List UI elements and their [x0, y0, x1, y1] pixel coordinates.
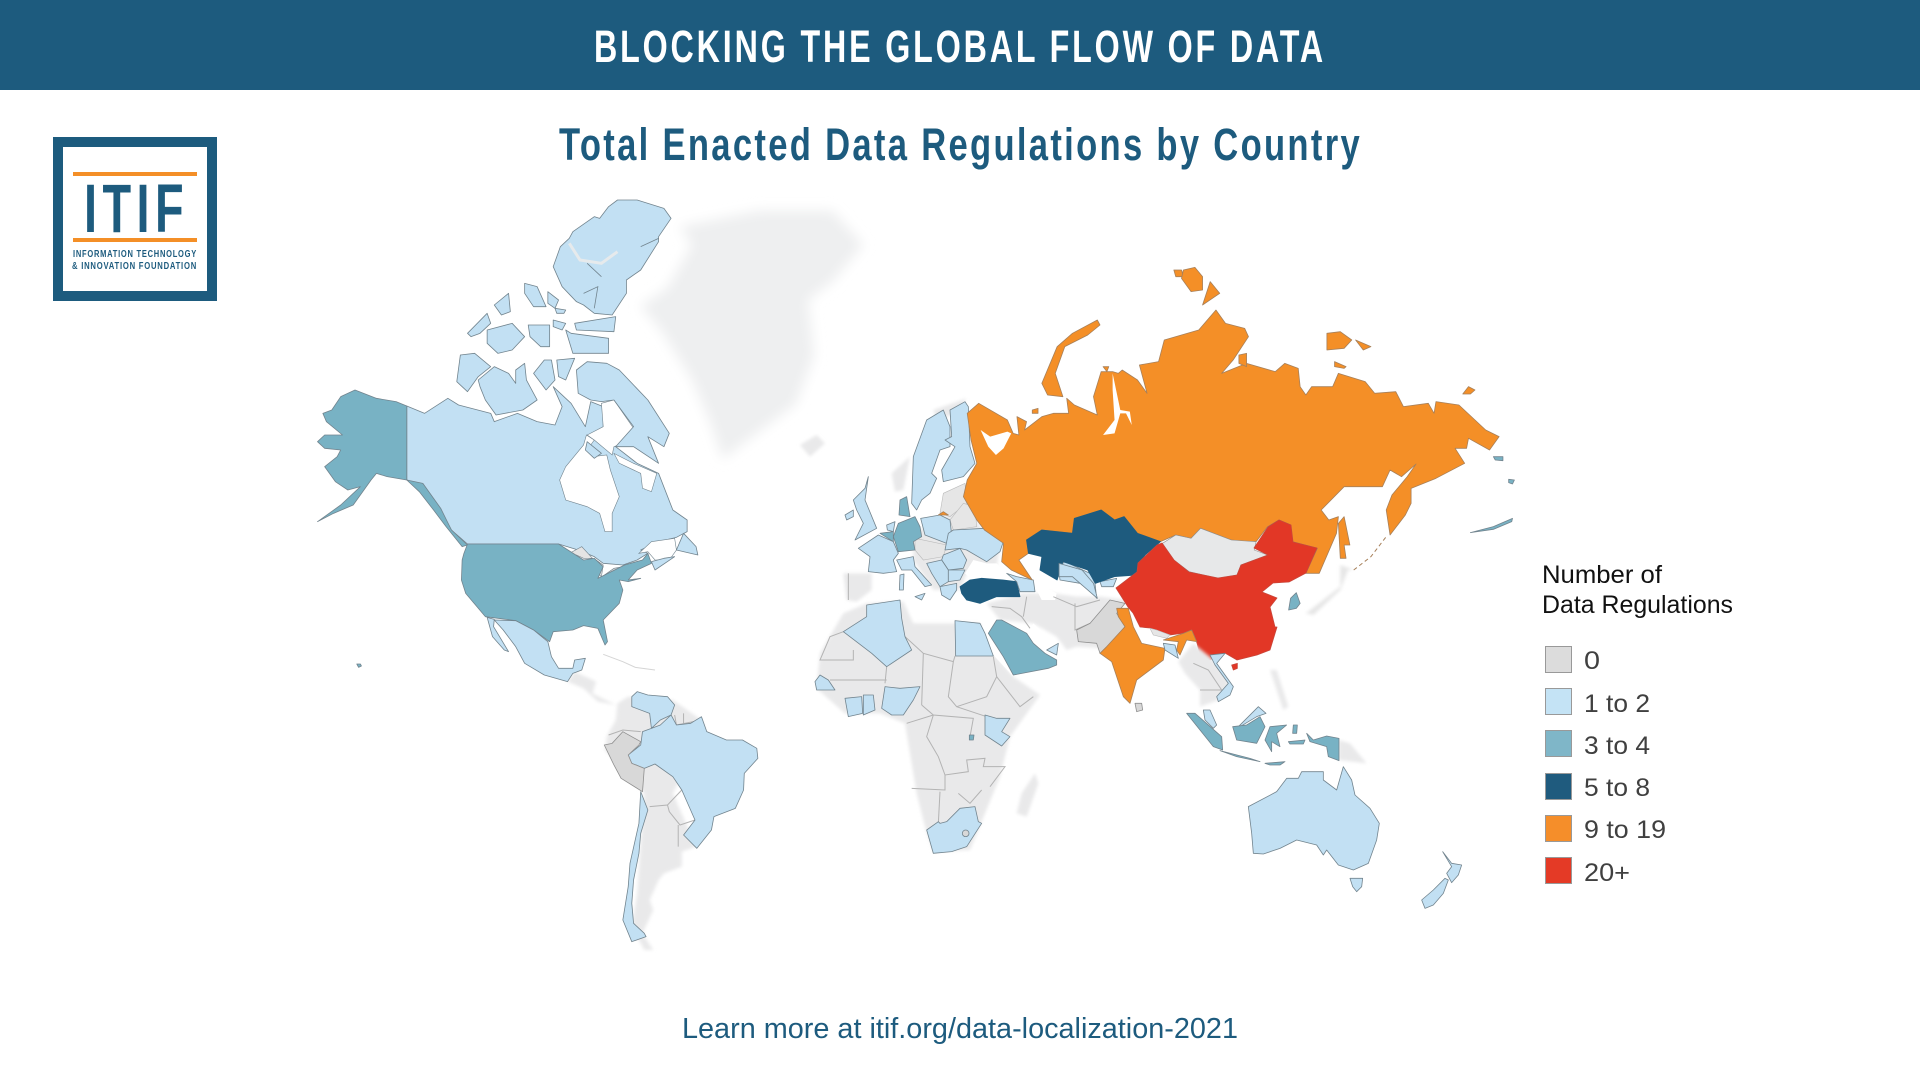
India: [1100, 608, 1165, 703]
Ukraine: [945, 528, 1003, 562]
legend item: 1 to 2: 1 to 2: [1584, 690, 1650, 718]
map: Russia and neighbours: [963, 267, 1514, 615]
legend item: 9 to 19: [1546, 816, 1666, 844]
Nigeria: [882, 687, 920, 715]
Ghana: [863, 695, 875, 715]
logo: ITIF: INFORMATION TECHNOLOGY: [73, 249, 197, 260]
Black Sea: [965, 560, 1013, 580]
Baffin Island: [576, 362, 669, 463]
Arctic islands: [457, 283, 616, 415]
Ireland: [845, 510, 853, 520]
Sri Lanka: [1135, 703, 1143, 712]
logo: ITIF: & INNOVATION FOUNDATION: [72, 261, 197, 272]
header banner: [0, 0, 1920, 90]
Baltic states: [940, 483, 967, 517]
Severnaya Zemlya: [1174, 267, 1220, 305]
map: Greenland and faint islands: [640, 211, 863, 459]
map: North America: [317, 200, 698, 578]
Sakhalin: [1338, 517, 1350, 558]
France: [858, 535, 898, 573]
Kazakhstan: [1027, 510, 1160, 583]
Italy: [897, 557, 932, 587]
map: Europe, Africa, Middle East: [800, 398, 1165, 853]
Gulf of Ob: [1103, 373, 1132, 435]
South Africa: [927, 807, 982, 853]
Hainan: [1232, 663, 1237, 670]
Kolguev and small islands: [1032, 353, 1247, 413]
Turkey: [960, 578, 1020, 603]
faint Central and South America land: [567, 672, 705, 950]
Lesotho: [962, 830, 969, 837]
Foxe Basin: [587, 400, 634, 455]
Chile: [623, 792, 648, 942]
Sweden and Norway: [912, 410, 950, 510]
Newfoundland: [676, 533, 698, 555]
world map: [317, 200, 1514, 950]
Sulawesi: [1265, 725, 1287, 752]
USA: [461, 544, 651, 645]
Venezuela: [632, 692, 675, 728]
Persian Gulf: [1027, 623, 1055, 650]
legend item: 20+: 20+: [1584, 859, 1630, 887]
Hawaii: [357, 664, 361, 667]
Rwanda: [969, 735, 974, 740]
New Zealand South Island: [1422, 878, 1448, 908]
Alaska panhandle: [407, 480, 467, 547]
South America borders: [609, 713, 701, 847]
faint Southeast Asia land: [1178, 643, 1367, 763]
Algeria: [843, 600, 912, 667]
Wrangel Island: [1463, 387, 1475, 394]
Greece: [940, 583, 957, 600]
Sardinia: [899, 574, 904, 590]
legend item: 0: [1546, 646, 1600, 675]
Senegal: [815, 675, 835, 690]
legend item: 1 to 2: [1546, 688, 1650, 718]
Attu: [1509, 479, 1514, 484]
Maluku: [1293, 725, 1297, 733]
Egypt: [955, 621, 993, 656]
legend: [1542, 561, 1733, 887]
Sicily: [915, 593, 925, 600]
legend title: [1542, 561, 1733, 619]
logo: ITIF: ITIF: [84, 170, 189, 247]
Kyrgyzstan: [1100, 578, 1117, 587]
Great Lakes: [569, 547, 623, 578]
Romania: [942, 548, 967, 570]
subtitle: Total Enacted Data Regulations by Country: [559, 119, 1362, 170]
Papua: [1307, 733, 1339, 761]
legend item: 3 to 4: 3 to 4: [1584, 732, 1650, 760]
Commander islands: [1493, 457, 1503, 461]
Nova Scotia: [651, 557, 675, 570]
Alaska: [317, 390, 407, 522]
Himalayan India: [1163, 630, 1197, 655]
Malaysia peninsula: [1203, 710, 1217, 728]
Sumatra: [1187, 713, 1223, 750]
Baja California: [487, 617, 509, 652]
legend title: Number of: [1542, 561, 1662, 589]
Cuba and Hispaniola: [603, 654, 655, 670]
Turkmenistan and Uzbekistan inset: [1059, 563, 1097, 598]
Kaliningrad: [938, 512, 948, 515]
Belarus: [950, 503, 977, 530]
Bulgaria: [948, 570, 965, 582]
Brazil: [628, 715, 758, 848]
logo: ITIF: [58, 142, 212, 296]
legend item: 3 to 4: [1546, 730, 1650, 760]
Finland: [942, 402, 975, 482]
Gulf of St Lawrence: [639, 538, 676, 560]
Kenya: [985, 715, 1010, 746]
Ivory Coast: [845, 697, 863, 717]
Lesser Sunda: [1265, 762, 1285, 765]
Central Europe: [915, 538, 947, 560]
New Siberian Islands: [1327, 332, 1371, 368]
Red Sea: [980, 625, 1013, 677]
Bangladesh: [1163, 643, 1178, 658]
Denmark: [899, 497, 910, 517]
Hudson Bay: [560, 435, 619, 532]
South Korea: [1289, 593, 1300, 610]
New Zealand North Island: [1443, 852, 1462, 883]
Uzbekistan: [1058, 562, 1097, 598]
Mongolia: [1162, 528, 1268, 578]
Malaysia Borneo: [1238, 707, 1266, 727]
Borneo: [1233, 717, 1265, 743]
UAE: [1047, 643, 1058, 655]
header banner: BLOCKING THE GLOBAL FLOW OF DATA: [594, 21, 1326, 72]
Novaya Zemlya: [1042, 320, 1100, 397]
Nepal: [1150, 628, 1170, 638]
Japan: [1306, 565, 1354, 615]
China: [1116, 520, 1317, 660]
Pakistan: [1077, 600, 1125, 653]
Netherlands: [887, 522, 895, 532]
footer link text: Learn more at itif.org/data-localization-2021: [682, 1013, 1238, 1045]
Southeast Asia borders: [1193, 663, 1222, 690]
Belgium: [880, 532, 893, 542]
legend item: 9 to 19: 9 to 19: [1584, 816, 1666, 844]
Kuril islands: [1354, 537, 1386, 570]
Southampton Island: [585, 442, 601, 458]
Vietnam: [1210, 653, 1233, 702]
Ellesmere Island: [553, 200, 671, 315]
Balkans: [927, 560, 948, 587]
legend title: Data Regulations: [1542, 591, 1733, 619]
Mexico: [494, 620, 585, 682]
Africa borders: [820, 573, 1100, 823]
Java: [1220, 751, 1260, 762]
White Sea: [981, 430, 1011, 455]
Australia: [1248, 767, 1379, 870]
Peru: [604, 732, 644, 792]
Aleutians east: [1470, 518, 1512, 533]
UK: [853, 477, 877, 540]
Tasmania: [1350, 878, 1363, 892]
Russia: [963, 310, 1499, 580]
Ellesmere fjords: [569, 238, 659, 308]
map: Americas south: [357, 544, 758, 950]
legend item: 20+: [1546, 858, 1630, 887]
legend item: 5 to 8: 5 to 8: [1584, 774, 1650, 802]
Poland: [921, 515, 952, 543]
Caspian Sea: [1032, 557, 1057, 600]
Hudson Strait: [614, 453, 657, 492]
Seram: [1288, 740, 1305, 744]
Caucasus: [1007, 573, 1035, 592]
Germany: [893, 517, 922, 552]
Saudi Arabia: [988, 620, 1057, 675]
legend item: 0: 0: [1584, 647, 1600, 675]
map: Southeast Asia and Oceania: [1150, 628, 1462, 908]
faint base land: [800, 398, 1127, 852]
legend item: 5 to 8: [1546, 774, 1650, 802]
Canada mainland: [407, 387, 687, 565]
